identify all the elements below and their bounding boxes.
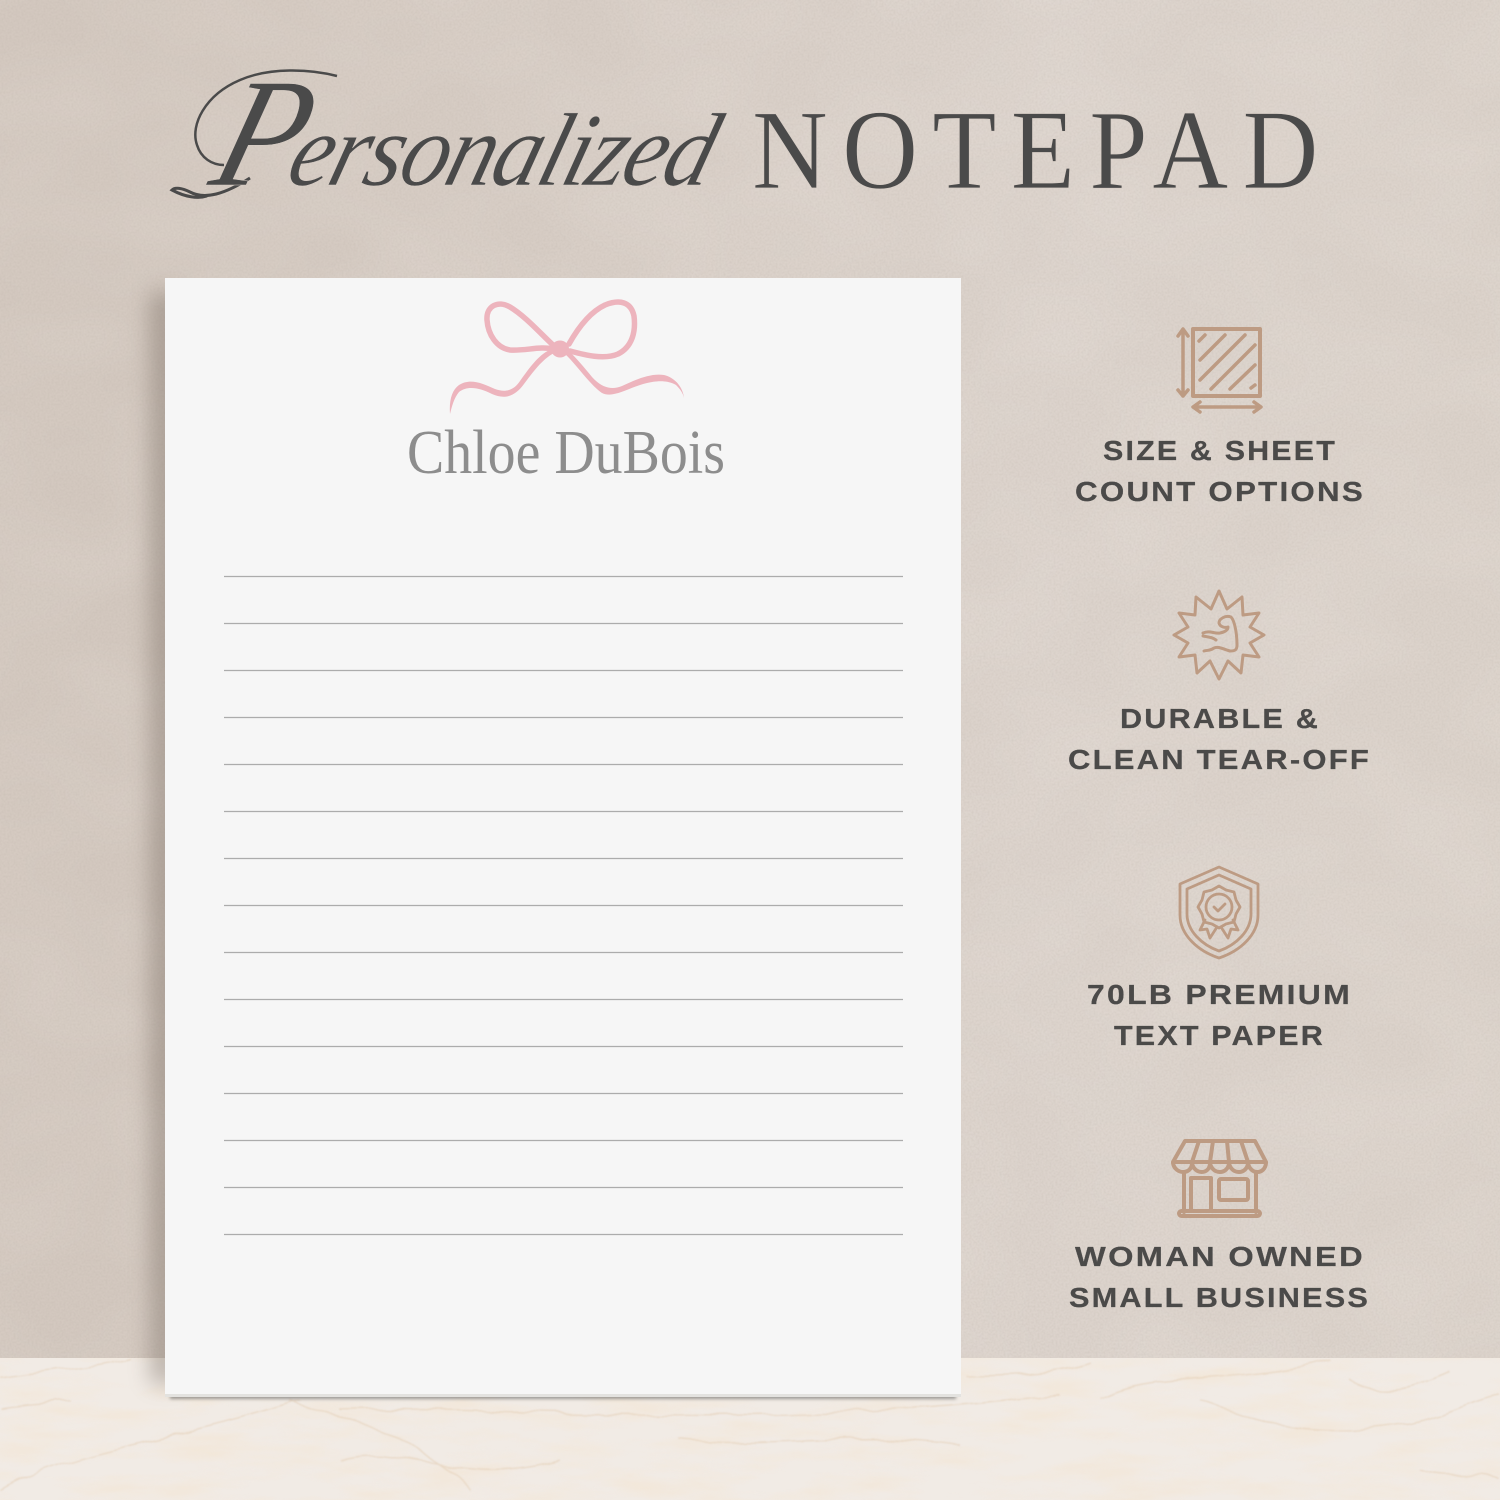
personalized name: Chloe DuBois	[407, 419, 725, 487]
feature: woman owned	[1069, 1141, 1370, 1313]
icon: storefront	[1173, 1141, 1266, 1216]
label: DURABLE &	[1120, 703, 1320, 734]
notepad	[150, 278, 961, 1399]
label: 70LB PREMIUM	[1087, 979, 1352, 1010]
icon: sheet with dimension arrows	[1178, 329, 1261, 412]
word NOTEPAD: NOTEPAD	[752, 88, 1318, 213]
feature: durable	[1068, 591, 1371, 775]
label: COUNT OPTIONS	[1075, 476, 1365, 507]
script word: ersonalized	[277, 94, 733, 208]
feature: premium paper	[1087, 867, 1352, 1051]
label: WOMAN OWNED	[1075, 1241, 1365, 1272]
marble floor	[0, 1358, 1500, 1500]
title	[172, 48, 1318, 219]
label: SMALL BUSINESS	[1069, 1282, 1370, 1313]
icon: strong arm in burst	[1174, 591, 1264, 679]
label: CLEAN TEAR-OFF	[1068, 744, 1371, 775]
ruled lines	[224, 576, 903, 1234]
icon: shield with rosette	[1180, 867, 1258, 958]
label: TEXT PAPER	[1114, 1020, 1325, 1051]
bow	[450, 302, 684, 414]
script word: P	[196, 48, 334, 219]
script word	[172, 48, 746, 219]
label: SIZE & SHEET	[1103, 435, 1337, 466]
feature: size and sheet count	[1075, 329, 1365, 507]
